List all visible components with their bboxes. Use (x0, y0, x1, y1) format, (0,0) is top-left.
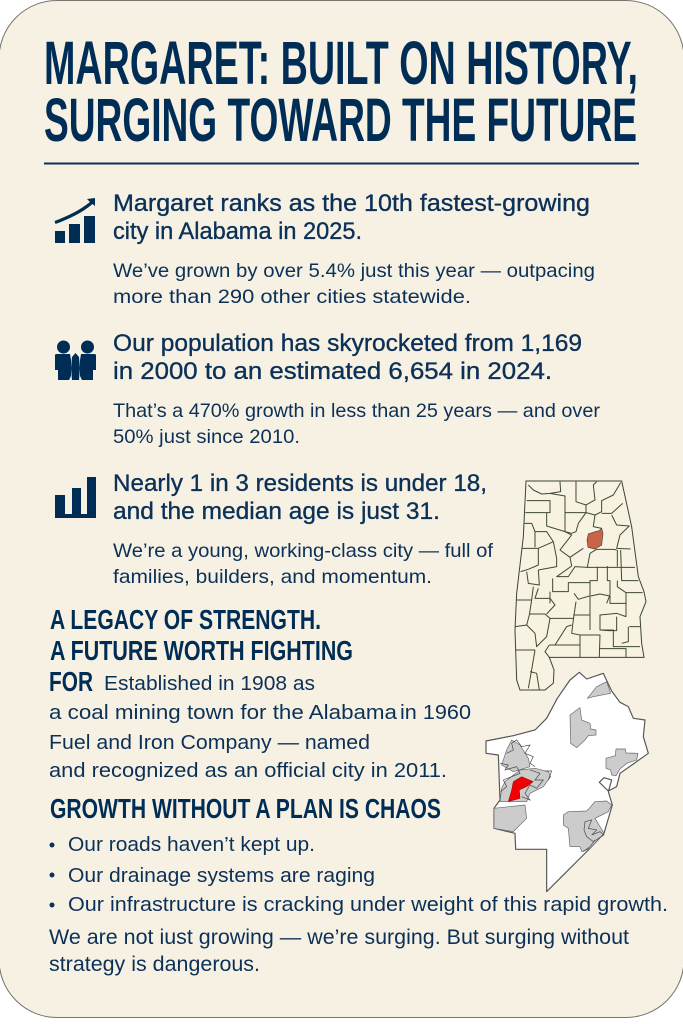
stat 2: population: 50% just since 2010. (113, 426, 300, 448)
section: growth without a plan (50, 793, 668, 916)
icon: growth chart with arrow (54, 198, 95, 243)
stat 2: population (113, 330, 601, 448)
section: growth without a plan: Our roads haven’t kept up. (68, 833, 315, 856)
section: growth without a plan: Our infrastructure is cracking under weight of this rapid growth. (68, 893, 668, 916)
title (44, 29, 638, 154)
stat 3: young residents (113, 470, 494, 588)
stat 3: young residents: and the median age is just 31. (113, 498, 440, 525)
section: growth without a plan: Our drainage systems are raging (68, 864, 375, 887)
stat 1: fastest-growing: more than 290 other cities statewide. (113, 286, 471, 308)
map: Jefferson County municipalities (486, 672, 648, 892)
closing statement: We are not iust growing — we’re surging. But surging without (49, 926, 629, 949)
icon: bar chart (55, 477, 96, 518)
section: a legacy of strength: A LEGACY OF STRENGTH. (50, 604, 321, 635)
stat 2: population: Our population has skyrocketed from 1,169 (113, 330, 582, 357)
stat 2: population: That’s a 470% growth in less than 25 years — and over (113, 400, 601, 422)
section: a legacy of strength: in 1960 (400, 701, 471, 724)
stat 3: young residents: We’re a young, working-class city — full of (113, 540, 494, 562)
closing statement: strategy is dangerous. (49, 953, 260, 976)
map: Alabama counties (515, 481, 646, 690)
section: a legacy of strength: Established in 1908 as (104, 672, 315, 695)
stat 1: fastest-growing: Margaret ranks as the 10th fastest-growing (113, 190, 590, 217)
county: highlighted red-orange (587, 528, 603, 549)
section: a legacy of strength: FOR (49, 666, 93, 697)
stat 1: fastest-growing: city in Alabama in 2025. (113, 218, 362, 245)
closing statement (49, 926, 629, 976)
section: a legacy of strength: A FUTURE WORTH FIGHTING (50, 635, 353, 666)
stat 3: young residents: Nearly 1 in 3 residents is under 18, (113, 470, 487, 497)
section: a legacy of strength: and recognized as an official city in 2011. (49, 759, 447, 782)
stat 2: population: in 2000 to an estimated 6,654 in 2024. (113, 358, 552, 385)
icon: family (55, 340, 96, 380)
section: a legacy of strength: Fuel and Iron Company — named (49, 731, 370, 754)
section: a legacy of strength (49, 604, 471, 782)
section: growth without a plan: GROWTH WITHOUT A PLAN IS CHAOS (50, 793, 441, 824)
city: Margaret-area highlight in red (508, 777, 533, 802)
section: a legacy of strength: a coal mining town for the Alabama (49, 701, 398, 724)
stat 1: fastest-growing: We’ve grown by over 5.4% just this year — outpacing (113, 260, 595, 282)
stat 3: young residents: families, builders, and momentum. (113, 566, 432, 588)
stat 1: fastest-growing (113, 190, 595, 308)
